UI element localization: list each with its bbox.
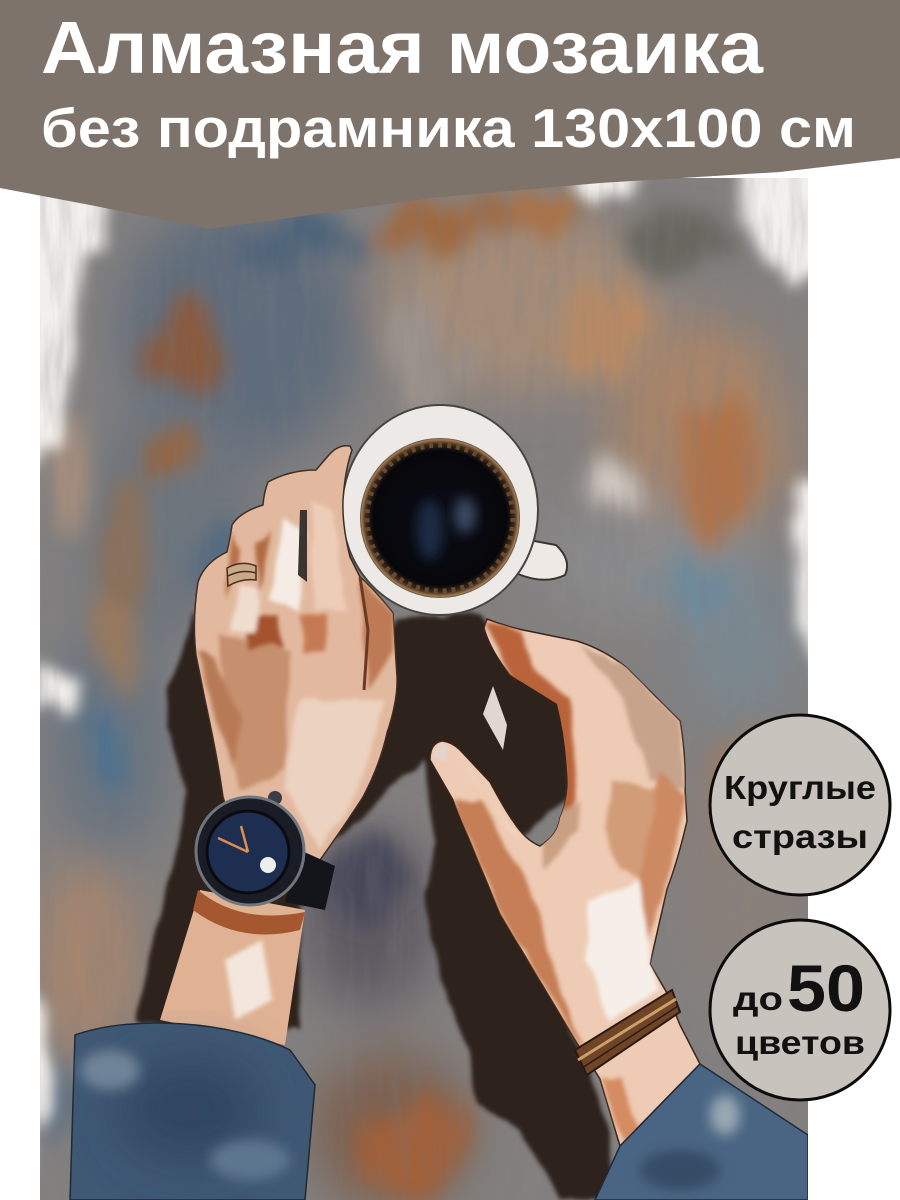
white paper edges [40, 178, 808, 1146]
right hand with bracelet [430, 619, 700, 1146]
left hand with ring [194, 446, 397, 860]
badge: round rhinestones: Круглые [724, 769, 876, 806]
wristwatch [196, 791, 335, 910]
hand shading [453, 621, 687, 1146]
top banner [0, 0, 900, 229]
title line 2: без подрамника 130х100 см [41, 97, 856, 159]
left forearm [160, 890, 305, 1045]
white gap between fingers [483, 686, 507, 750]
badge: up to 50 colours: цветов [735, 1024, 865, 1061]
painting background wash [20, 160, 830, 1200]
title line 1: Алмазная мозаика [41, 6, 764, 89]
left sleeve [70, 1023, 315, 1200]
badge: round rhinestones [710, 715, 890, 895]
badge: up to 50 colours: 50 [787, 951, 865, 1025]
dark shadow under hands [135, 610, 615, 1200]
bracelet [575, 990, 680, 1075]
badge: up to 50 colours: до [733, 980, 783, 1017]
hand shading [198, 500, 393, 850]
badge: round rhinestones: стразы [732, 818, 868, 855]
badge: up to 50 colours [710, 920, 890, 1100]
ring [227, 563, 256, 586]
right sleeve [595, 1064, 808, 1200]
cup [342, 405, 567, 615]
painting: watercolor coffee and hands [20, 160, 830, 1200]
